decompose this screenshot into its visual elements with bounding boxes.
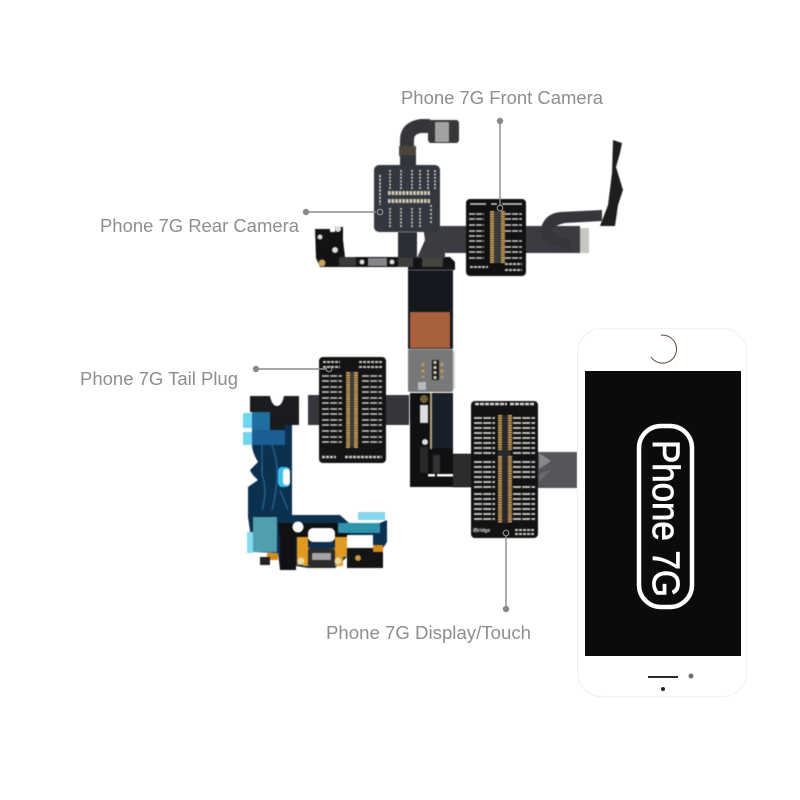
model badge: Phone 7G [644, 440, 686, 597]
sensor dot [661, 687, 665, 691]
callout: display and touch [326, 530, 531, 643]
main board lower [410, 393, 472, 487]
rear camera bridge board [374, 165, 440, 232]
speaker slot [648, 676, 678, 678]
callout: front camera [401, 88, 604, 211]
callout: rear camera [100, 209, 383, 236]
front camera flex [417, 140, 623, 267]
display bridge board: iBridge [473, 528, 490, 534]
rear camera flex and module [399, 120, 459, 167]
phone display [578, 328, 746, 696]
main board middle [408, 270, 453, 349]
tail plug flex assembly [243, 396, 387, 570]
front camera dot [688, 674, 694, 678]
callout: front camera: Phone 7G Front Camera [401, 88, 604, 108]
copper shield [410, 312, 450, 348]
callout: tail plug: Phone 7G Tail Plug [80, 369, 238, 389]
display flex [453, 452, 577, 488]
front camera bridge board [466, 199, 526, 276]
tail plug bridge board [319, 357, 386, 463]
screen [585, 371, 741, 656]
cyan slot [278, 467, 290, 487]
logic board top strip [315, 226, 455, 270]
home button ring [651, 335, 677, 363]
display bridge board [471, 401, 538, 538]
callout: display and touch: Phone 7G Display/Touch [326, 623, 531, 643]
SIM tray [408, 349, 455, 392]
tail plug flex [308, 395, 418, 425]
callout: rear camera: Phone 7G Rear Camera [100, 216, 300, 236]
callout: tail plug [80, 366, 332, 389]
